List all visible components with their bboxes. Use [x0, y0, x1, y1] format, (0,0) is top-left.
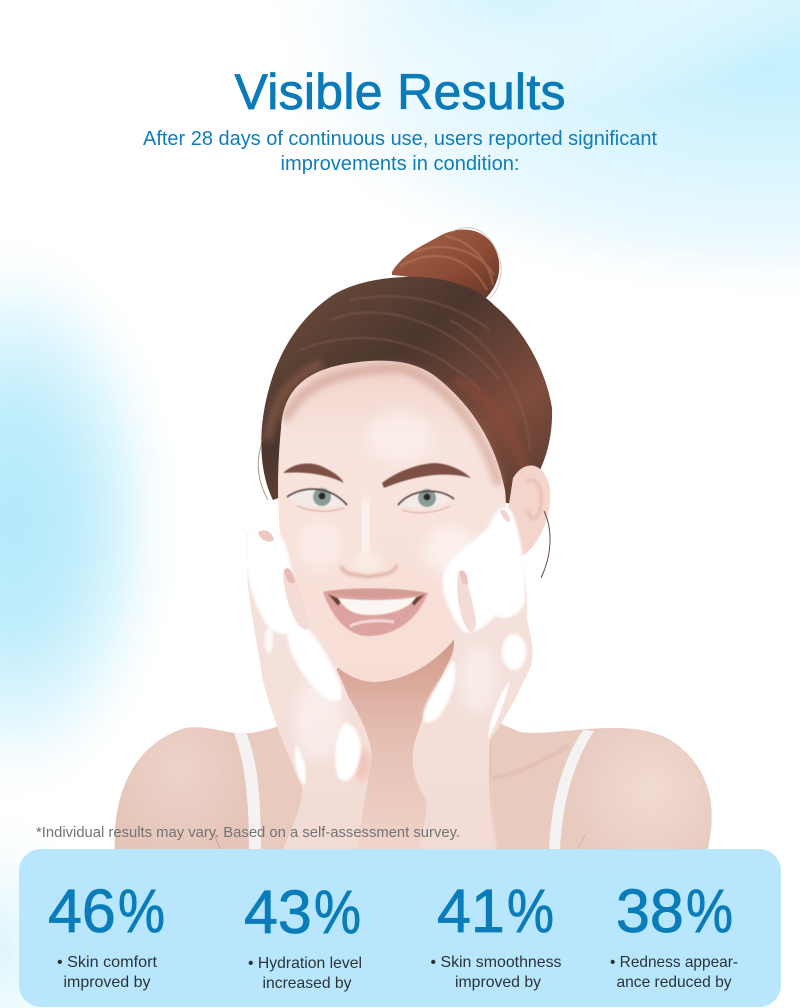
underarm crease left: [214, 832, 221, 849]
stat: skin comfort: 46: [48, 877, 116, 945]
stat: skin comfort: [48, 877, 165, 991]
neck shadow: [336, 639, 496, 849]
stat: skin comfort: improved by: [64, 974, 150, 991]
footnote: *Individual results may vary. Based on a self-assessment survey.: [36, 824, 460, 841]
stat: skin smoothness: 41: [437, 877, 505, 945]
stat: redness appearance: [610, 877, 738, 991]
foam on left hand: [244, 523, 361, 785]
title: Visible Results: [234, 64, 566, 120]
subtitle: After 28 days of continuous use, users reported significant: [143, 128, 657, 150]
stray hair strand: [541, 511, 550, 578]
right eyebrow: [382, 463, 471, 488]
underarm crease right: [578, 835, 585, 849]
stat: skin smoothness: %: [507, 877, 554, 945]
stat: redness appearance: %: [686, 877, 733, 945]
right hand with foam: [412, 504, 533, 852]
stat: skin smoothness: improved by: [455, 974, 541, 991]
left flyaway strands: [258, 430, 268, 500]
stat: skin comfort: %: [118, 877, 165, 945]
stat: skin smoothness: • Skin smoothness: [430, 954, 562, 971]
hair: [261, 277, 552, 505]
left strap: [234, 732, 261, 852]
left finger and nail: [283, 570, 309, 630]
panel: statistics: [19, 849, 781, 1007]
stat: skin comfort: • Skin comfort: [57, 954, 158, 971]
left hand with foam: [244, 523, 372, 852]
bun flyaway strand: [452, 227, 501, 298]
subtitle: improvements in condition:: [280, 153, 520, 175]
bun: [392, 229, 499, 300]
stat: redness appearance: • Redness appear-: [610, 954, 738, 971]
smile: [323, 588, 428, 636]
subtitle: [143, 128, 657, 175]
right eye: [398, 489, 454, 513]
left eye: [287, 488, 347, 511]
right finger and nail: [457, 572, 476, 632]
left shoulder: [114, 727, 250, 849]
collarbone shadow: [488, 745, 568, 778]
left eyebrow: [283, 464, 344, 483]
stat: redness appearance: ance reduced by: [616, 974, 732, 991]
stat: redness appearance: 38: [616, 877, 684, 945]
face: [278, 361, 506, 682]
stat: hydration level: • Hydration level: [248, 955, 362, 972]
photo: smiling woman washing face with foam: [115, 227, 712, 852]
right ear: [505, 466, 550, 556]
white gap between hand and jaw: [315, 638, 332, 662]
chest and right shoulder: [250, 724, 712, 849]
foam on right hand: [423, 508, 526, 722]
stat: hydration level: 43: [244, 878, 312, 946]
stat: hydration level: %: [314, 878, 361, 946]
stat: hydration level: increased by: [262, 975, 352, 992]
stat: hydration level: [244, 878, 362, 992]
right strap: [549, 730, 594, 852]
nose: [341, 500, 397, 577]
stat: skin smoothness: [430, 877, 562, 991]
